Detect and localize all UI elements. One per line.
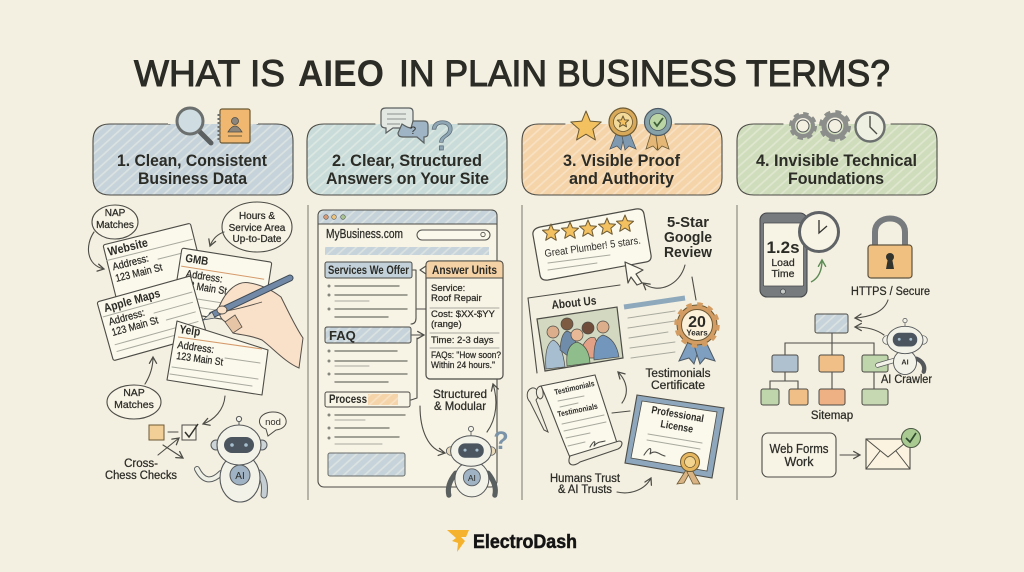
title: WHAT IS xyxy=(134,53,285,94)
callout: hours and service area xyxy=(222,202,292,252)
label: structured and modular xyxy=(433,387,487,413)
panel header 1: 1. Clean, Consistent xyxy=(117,151,267,170)
callout: hours and service area: Hours & xyxy=(239,211,275,222)
arrow: robot to answer units xyxy=(487,384,496,432)
arrow: load time up xyxy=(811,260,822,282)
label: AI crawler: AI Crawler xyxy=(881,374,932,386)
callout: NAP matches bottom: Matches xyxy=(114,399,154,411)
label: testimonials certificate xyxy=(646,368,711,392)
icon: robot nodding xyxy=(197,416,267,502)
icon: phone with load time: Time xyxy=(772,268,795,280)
illustration: testimonials scroll: Testimonials xyxy=(553,379,596,397)
icon: phone with load time: 1.2s xyxy=(766,238,800,257)
icon: clock xyxy=(800,212,838,252)
arrow: Yelp to checkbox xyxy=(203,396,225,424)
arrow: NAP to Website card xyxy=(88,232,104,269)
arrow: crawler to sitemap xyxy=(855,327,884,335)
arrow: trust label to certificate xyxy=(617,478,651,493)
logo: ElectroDash: ElectroDash xyxy=(473,532,577,553)
icon: robot asking xyxy=(446,426,496,497)
box: web forms work xyxy=(762,433,836,477)
certificate: professional license: Professional xyxy=(650,404,705,425)
panel header 2: 2. Clear, Structured xyxy=(332,151,482,170)
icon: cursor xyxy=(625,262,643,285)
card: Yelp: Address: xyxy=(177,339,215,356)
label: 5-star Google review: Google xyxy=(664,229,712,246)
icon: phone with load time xyxy=(760,213,807,297)
label: HTTPS secure: HTTPS / Secure xyxy=(851,286,930,298)
arrow: HTTPS to sitemap xyxy=(855,300,888,318)
panel: answer units: FAQs: "How soon? xyxy=(431,350,501,360)
card: GMB: 123 Main St xyxy=(178,278,228,297)
card: Website: Address: xyxy=(111,253,150,273)
card: GMB xyxy=(172,248,272,325)
callout: NAP matches top: Matches xyxy=(96,220,134,231)
panel header 4: Foundations xyxy=(788,169,884,188)
block: placeholder button xyxy=(328,453,405,476)
icon: cross-checks xyxy=(149,424,198,458)
panel: answer units: Cost: $XX-$YY xyxy=(431,309,496,320)
title: AIEO xyxy=(298,53,384,94)
panel: answer units: Time: 2-3 days xyxy=(431,335,494,346)
icon: padlock xyxy=(868,218,912,278)
badge: 20 years xyxy=(676,277,718,364)
panel: answer units: Service: xyxy=(431,283,465,294)
label: structured and modular: Structured xyxy=(433,387,487,401)
card: Apple Maps: Apple Maps xyxy=(102,286,162,315)
panel header 1: Business Data xyxy=(138,169,247,188)
section: process xyxy=(325,392,410,444)
icon: envelope with check xyxy=(866,428,920,469)
arrow: scroll to about us xyxy=(618,372,626,403)
callout: NAP matches top xyxy=(92,205,138,239)
panel: visible proof xyxy=(527,209,724,496)
icon: address book xyxy=(219,109,250,143)
title: IN PLAIN BUSINESS TERMS? xyxy=(399,53,890,94)
label: structured and modular: & Modular xyxy=(434,399,486,413)
section: FAQ xyxy=(325,327,411,382)
icon: robot nodding: AI xyxy=(235,471,245,482)
arrow: review label to cursor xyxy=(643,265,685,288)
panel: answer units: Roof Repair xyxy=(431,293,482,304)
icon: star and medals xyxy=(571,108,672,150)
card: Apple Maps: 123 Main St xyxy=(110,314,160,339)
label: cross-chess checks: Chess Checks xyxy=(105,470,177,482)
illustration: hand with pen xyxy=(203,278,303,368)
panel: answer units xyxy=(420,261,503,379)
callout: hours and service area: Up-to-Date xyxy=(233,234,282,245)
arrow: NAP to Apple Maps card xyxy=(145,357,153,384)
icon: speech bubbles and question mark: ? xyxy=(410,125,416,137)
label: sitemap: Sitemap xyxy=(811,410,853,422)
panel: about us xyxy=(528,285,685,373)
box: web forms work: Web Forms xyxy=(770,442,828,456)
logo: ElectroDash xyxy=(447,530,577,553)
panel header 3: and Authority xyxy=(569,169,675,188)
section: FAQ: FAQ xyxy=(329,328,356,343)
label: testimonials certificate: Testimonials xyxy=(646,368,711,380)
card: five-star review xyxy=(533,209,651,280)
chart: sitemap tree xyxy=(761,314,888,405)
card: five-star review: Great Plumber! 5 stars. xyxy=(544,235,641,260)
browser window: MyBusiness.com xyxy=(326,226,403,241)
card: GMB: Address: xyxy=(185,268,223,286)
card: Apple Maps xyxy=(97,276,207,361)
callout: NAP matches bottom xyxy=(107,385,161,419)
panel: about us: About Us xyxy=(551,293,597,312)
callout: nod: nod xyxy=(265,417,281,428)
panel: structured answers xyxy=(318,210,509,497)
icon: question mark: ? xyxy=(493,427,509,455)
card: Apple Maps: Address: xyxy=(107,307,146,328)
icon: speech bubbles and question mark: ? xyxy=(430,112,454,159)
panel header 2 xyxy=(307,105,507,195)
card: Yelp xyxy=(167,321,268,395)
card: Yelp: 123 Main St xyxy=(176,350,224,369)
panel: technical foundations xyxy=(760,212,932,477)
dividers xyxy=(308,205,737,500)
panel header 1 xyxy=(93,124,293,195)
arrow: forms to email xyxy=(840,454,860,456)
panel: answer units: (range) xyxy=(431,319,462,330)
card: Website xyxy=(103,223,205,303)
card: Yelp: Yelp xyxy=(179,322,201,339)
icon: phone with load time: Load xyxy=(771,257,795,269)
connectors: sections to answer units xyxy=(411,270,445,453)
illustration: testimonials scroll: Testimonials xyxy=(557,402,599,419)
panel header 3 xyxy=(522,105,722,195)
panel header 4: 4. Invisible Technical xyxy=(756,151,917,170)
title xyxy=(134,53,890,94)
section: services we offer xyxy=(325,262,412,317)
certificate: professional license: License xyxy=(659,418,694,436)
box: web forms work: Work xyxy=(785,455,814,469)
label: testimonials certificate: Certificate xyxy=(651,380,705,392)
illustration: testimonials scroll xyxy=(527,375,622,465)
icon: AI crawler robot: AI xyxy=(901,357,909,366)
label: 5-star Google review: 5-Star xyxy=(667,214,709,231)
panel header 2: Answers on Your Site xyxy=(326,169,489,188)
panel: answer units: Answer Units xyxy=(432,263,497,277)
callout: NAP matches top: NAP xyxy=(105,208,126,219)
icon: AI crawler robot xyxy=(878,318,927,375)
callout: NAP matches bottom: NAP xyxy=(123,387,145,399)
panel header 4 xyxy=(737,105,937,195)
icon: magnifying glass xyxy=(168,105,258,143)
card: Website: Website xyxy=(106,235,150,259)
arrow: hours to GMB card xyxy=(210,232,224,246)
photo: team xyxy=(537,307,623,371)
badge: 20 years: 20 xyxy=(688,314,706,331)
callout: hours and service area: Service Area xyxy=(229,223,286,234)
label: 5-star Google review xyxy=(664,214,712,261)
icon: gears and clock xyxy=(792,112,884,142)
label: cross-chess checks xyxy=(105,458,177,482)
label: cross-chess checks: Cross- xyxy=(124,458,158,470)
icon: speech bubbles and question mark xyxy=(381,108,454,159)
section: process: Process xyxy=(329,392,367,406)
panel: business data cards xyxy=(88,202,303,502)
badge: 20 years: Years xyxy=(686,328,708,338)
label: humans trust and AI trusts xyxy=(550,473,621,496)
label: 5-star Google review: Review xyxy=(664,244,712,261)
callout: nod xyxy=(259,412,286,436)
icon: robot asking: AI xyxy=(468,473,476,483)
panel header 3: 3. Visible Proof xyxy=(563,151,680,170)
card: Website: 123 Main St xyxy=(114,262,164,285)
label: humans trust and AI trusts: Humans Trust xyxy=(550,473,621,485)
panel: answer units: Within 24 hours." xyxy=(431,360,495,370)
browser window xyxy=(318,210,497,487)
section: services we offer: Services We Offer xyxy=(328,263,409,277)
certificate: professional license xyxy=(625,395,724,484)
label: humans trust and AI trusts: & AI Trusts xyxy=(558,484,612,496)
card: GMB: GMB xyxy=(184,253,209,268)
